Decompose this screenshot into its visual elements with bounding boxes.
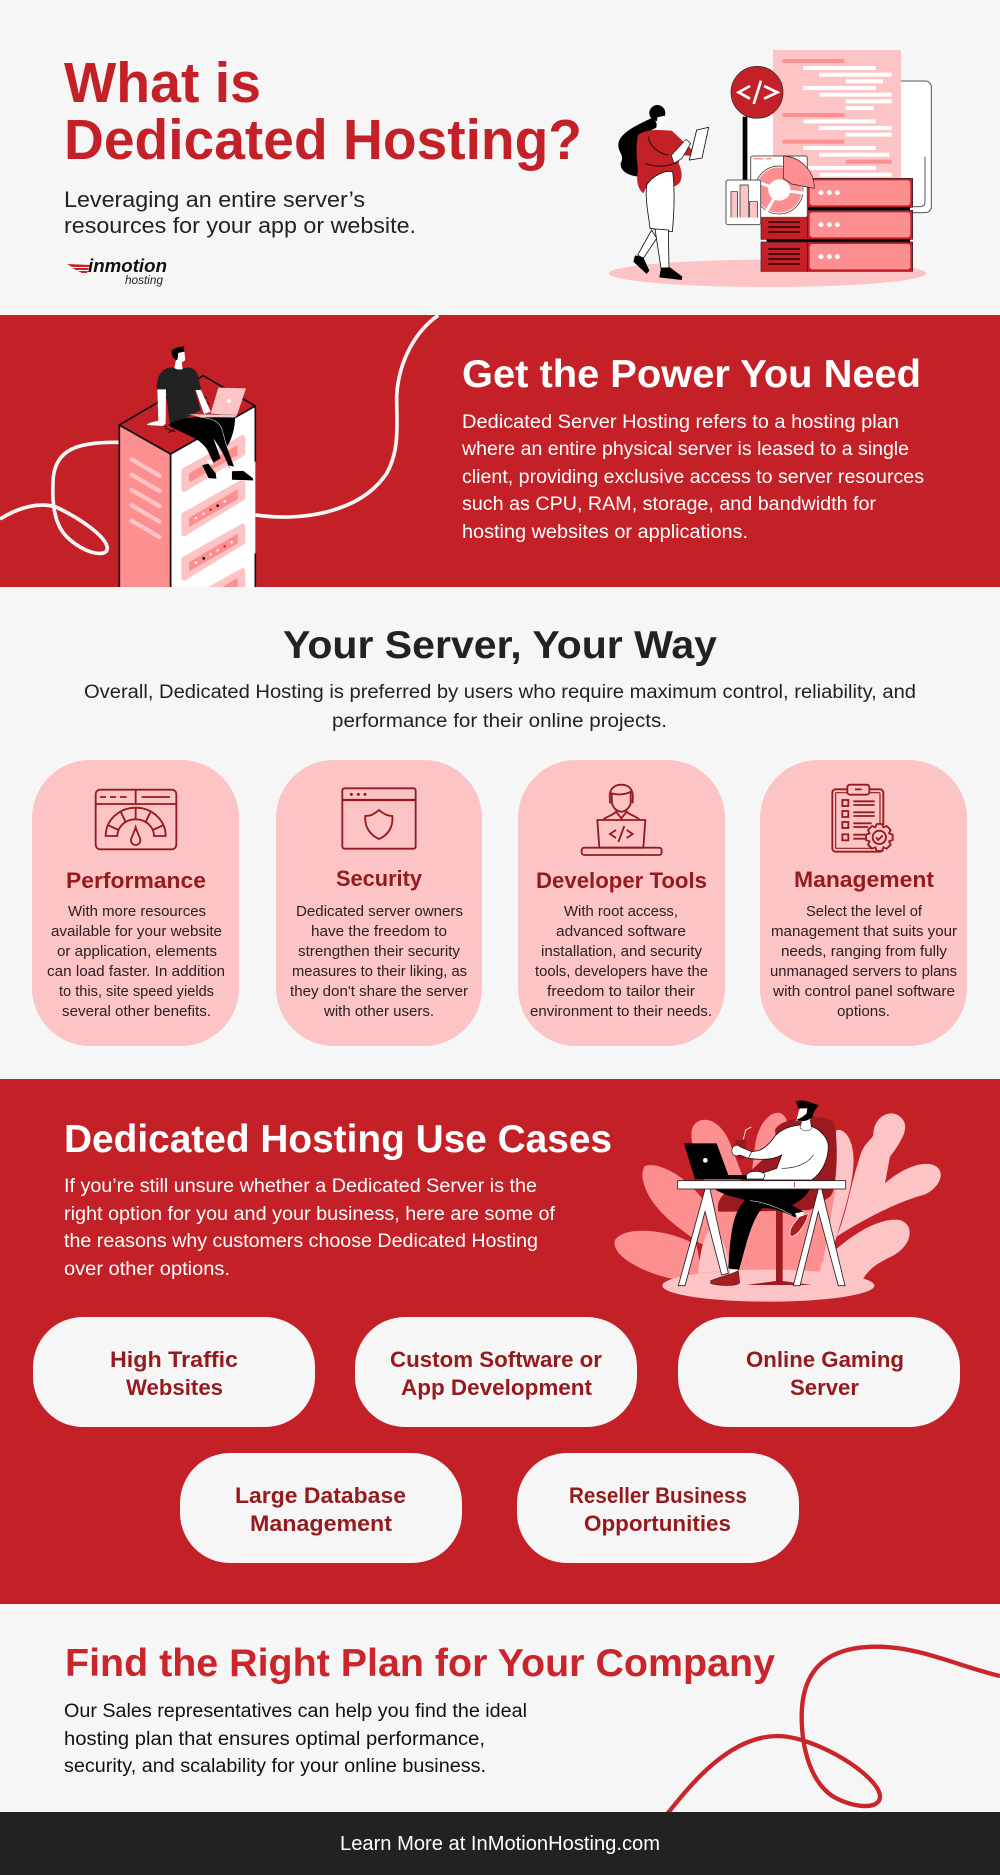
text: performance body: With more resources: [68, 903, 206, 920]
text: performance body: available for your website: [51, 923, 222, 940]
text: performance body: several other benefits.: [62, 1003, 211, 1020]
title: What is: [64, 51, 261, 115]
option: custom software: [355, 1317, 637, 1427]
icon: shield window: [342, 788, 416, 849]
option: large database management: Management: [250, 1511, 393, 1536]
footer bar: Learn More at InMotionHosting.com: [340, 1833, 660, 1855]
text: use cases description: right option for you and your business, here are some of: [64, 1204, 556, 1225]
text: performance body: or application, elements: [57, 943, 217, 960]
text: performance body: to this, site speed yields: [59, 983, 214, 1000]
option: custom software: Custom Software or: [390, 1347, 602, 1372]
heading: use cases: Dedicated Hosting Use Cases: [64, 1118, 612, 1161]
text: security body: Dedicated server owners: [296, 903, 463, 920]
text: power description: client, providing exclusive access to server resources: [462, 467, 924, 488]
text: performance body: can load faster. In addition: [47, 963, 225, 980]
server stack: [761, 178, 913, 271]
text: sales description: security, and scalability for your online business.: [64, 1756, 486, 1777]
code badge: [731, 66, 783, 182]
card: management: [760, 760, 967, 1046]
text: power description: where an entire physical server is leased to a single: [461, 439, 909, 460]
illustration: woman with servers and code: [609, 50, 931, 287]
seated man with laptop: [147, 346, 253, 481]
plant leaves: [615, 1113, 941, 1283]
option: custom software: App Development: [401, 1375, 593, 1400]
bar chart card: [726, 180, 761, 225]
heading: get the power you need: Get the Power You Need: [462, 353, 921, 396]
option: reseller business: [517, 1453, 799, 1563]
woman figure: [618, 105, 709, 280]
title: Dedicated Hosting?: [64, 108, 582, 172]
illustration: man at desk with plants: [615, 1101, 941, 1302]
text: use cases description: If you’re still unsure whether a Dedicated Server is the: [64, 1176, 537, 1197]
cup: [735, 1140, 747, 1159]
option: high traffic websites: Websites: [126, 1375, 223, 1400]
text: sales description: Our Sales representatives can help you find the ideal: [64, 1701, 527, 1722]
text: developer tools body: tools, developers have the: [535, 963, 708, 980]
text: security body: they don't share the server: [290, 983, 468, 1000]
icon: speed gauge window: [96, 790, 176, 849]
card: security: [276, 760, 482, 1046]
title: [64, 51, 582, 172]
floor ellipse: [662, 1270, 874, 1302]
text: management body: [770, 903, 957, 1020]
text: security body: [290, 903, 468, 1020]
heading: performance: Performance: [66, 868, 206, 893]
text: management body: with control panel software: [772, 983, 955, 1000]
floor ellipse: [609, 260, 926, 287]
option: online gaming server: Online Gaming: [746, 1347, 904, 1372]
heading: management: Management: [794, 867, 935, 892]
subtitle: [64, 187, 416, 238]
heading: security: Security: [336, 866, 423, 891]
option: large database management: Large Database: [235, 1483, 406, 1508]
text: management body: needs, ranging from fully: [781, 943, 947, 960]
heading: developer tools: Developer Tools: [536, 868, 707, 893]
heading: your server, your way: Your Server, Your Way: [283, 624, 717, 667]
text: power description: [461, 412, 924, 543]
chair: [718, 1117, 837, 1285]
text: security body: with other users.: [323, 1003, 434, 1020]
code window: [747, 81, 931, 213]
logo: inmotion hosting: hosting: [125, 273, 163, 287]
footer bar: [0, 1812, 1000, 1875]
text: security body: have the freedom to: [311, 923, 447, 940]
text: use cases description: over other options.: [64, 1259, 230, 1280]
card: developer tools: [518, 760, 725, 1046]
text: performance body: [47, 903, 225, 1020]
logo: inmotion hosting: inmotion: [88, 256, 167, 276]
desk: [678, 1181, 846, 1286]
text: developer tools body: installation, and security: [541, 943, 702, 960]
subtitle: Leveraging an entire server’s: [64, 187, 365, 212]
text: power description: Dedicated Server Hosting refers to a hosting plan: [462, 412, 899, 433]
text: developer tools body: environment to their needs.: [530, 1003, 712, 1020]
option: reseller business: Opportunities: [584, 1511, 731, 1536]
laptop: [684, 1143, 747, 1179]
panel: use cases: [0, 1079, 1000, 1604]
icon: clipboard with gear: [832, 785, 893, 852]
illustration: man on server tower: [0, 315, 440, 587]
text: use cases description: [64, 1176, 556, 1280]
text: developer tools body: [530, 903, 712, 1020]
text: section intro: performance for their online projects.: [332, 711, 667, 732]
text: sales description: [64, 1701, 527, 1777]
text: security body: strengthen their security: [298, 943, 461, 960]
code panel: [773, 50, 901, 182]
server tower: [118, 374, 256, 587]
text: management body: Select the level of: [806, 903, 923, 920]
text: power description: hosting websites or applications.: [462, 522, 748, 543]
option: online gaming server: [678, 1317, 960, 1427]
card: performance: [32, 760, 239, 1046]
text: management body: options.: [837, 1003, 890, 1020]
text: section intro: [84, 682, 916, 732]
decorative white curve: [0, 442, 119, 553]
dashboard card: [751, 156, 814, 217]
text: security body: measures to their liking, as: [292, 963, 467, 980]
option: high traffic websites: [33, 1317, 315, 1427]
panel: get the power you need: [0, 315, 1000, 587]
decorative red curve: [668, 1647, 1000, 1813]
option: online gaming server: Server: [790, 1375, 859, 1400]
text: developer tools body: With root access,: [564, 903, 678, 920]
text: section intro: Overall, Dedicated Hosting is preferred by users who require maximum control, reliability, and: [84, 682, 916, 703]
option: large database management: [180, 1453, 462, 1563]
text: sales description: hosting plan that ensures optimal performance,: [64, 1729, 485, 1750]
subtitle: resources for your app or website.: [64, 213, 416, 238]
option: reseller business: Reseller Business: [569, 1483, 747, 1508]
text: management body: management that suits your: [771, 923, 957, 940]
text: developer tools body: freedom to tailor their: [547, 983, 695, 1000]
icon: developer at laptop: [582, 785, 662, 855]
text: power description: such as CPU, RAM, storage, and bandwidth for: [462, 494, 877, 515]
text: developer tools body: advanced software: [556, 923, 686, 940]
text: management body: unmanaged servers to plans: [770, 963, 957, 980]
logo: inmotion hosting: [67, 256, 167, 287]
man: [711, 1101, 828, 1285]
option: high traffic websites: High Traffic: [110, 1347, 238, 1372]
text: use cases description: the reasons why customers choose Dedicated Hosting: [64, 1231, 538, 1252]
heading: find the right plan: Find the Right Plan for Your Company: [65, 1642, 775, 1685]
